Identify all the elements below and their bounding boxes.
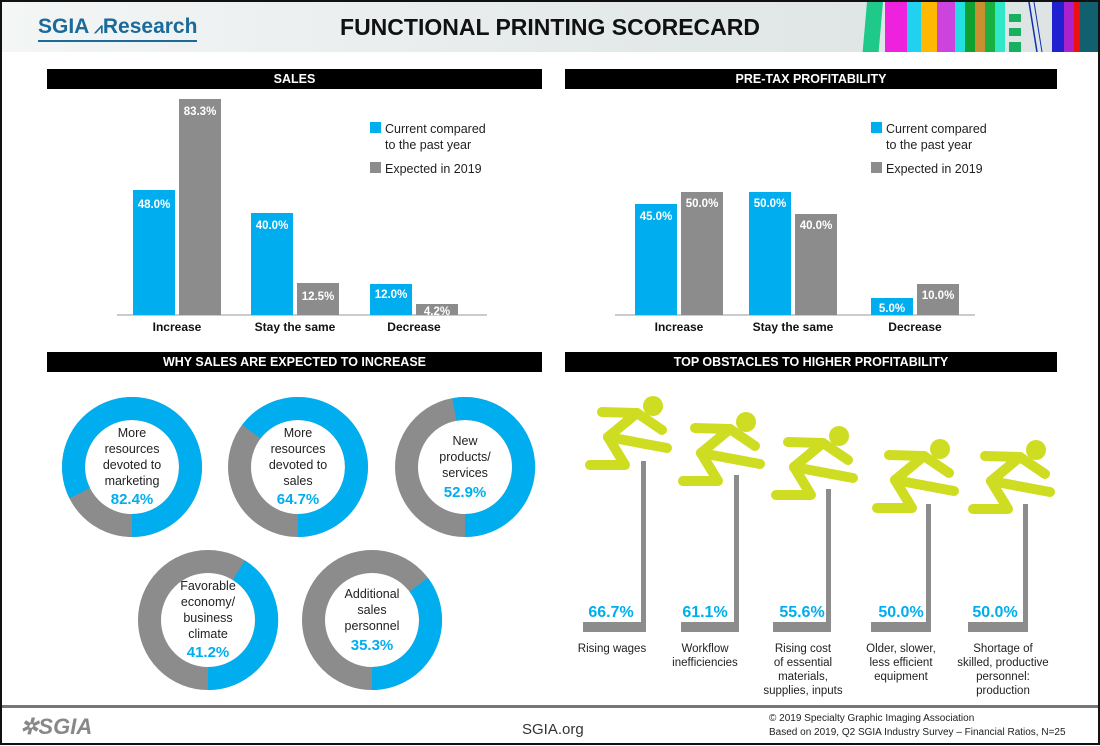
donut: economy [150, 562, 267, 679]
profit chart: 50.0% [754, 198, 786, 210]
hurdle 3: 55.6% [779, 604, 825, 621]
hurdle chart [578, 396, 1055, 697]
heading: why sales [47, 352, 542, 372]
donut: marketing: 82.4% [111, 491, 153, 508]
hurdle 3: of essential [774, 657, 832, 669]
donut: personnel: 35.3% [351, 637, 393, 654]
legend: profit [871, 122, 987, 176]
hurdle 4: 50.0% [878, 604, 924, 621]
donut: sales: sales [283, 474, 313, 488]
hurdle 1 [578, 396, 667, 655]
sales chart: 83.3% [184, 106, 216, 118]
hurdle 5: production [976, 685, 1030, 697]
hurdle 5: 50.0% [972, 604, 1018, 621]
hurdle 4: Older, slower, [866, 643, 936, 655]
title: FUNCTIONAL PRINTING SCORECARD [340, 14, 760, 40]
profit chart: 5.0% [879, 303, 905, 315]
donut: personnel [314, 562, 431, 678]
header band [2, 2, 1098, 52]
profit chart: Decrease [888, 320, 942, 334]
donut: personnel: Additional [345, 587, 399, 601]
footer [2, 705, 1098, 746]
heading: obstacles [565, 352, 1057, 372]
footer credits: Based on 2019, Q2 SGIA Industry Survey – Financial Ratios, N=25 [769, 727, 1066, 738]
sales chart: Stay the same [255, 320, 336, 334]
donut: sales [240, 408, 356, 526]
donut: economy: economy/ [181, 595, 236, 609]
hurdle 3: materials, [778, 671, 828, 683]
donut: marketing: devoted to [103, 458, 161, 472]
donut: economy: 41.2% [187, 644, 229, 661]
hurdle 2: 61.1% [682, 604, 728, 621]
sales chart: Increase [153, 320, 202, 334]
donut: marketing [74, 408, 191, 526]
hurdle 1: Rising wages [578, 643, 646, 655]
panel: sales [47, 69, 542, 334]
sales chart: 4.2% [424, 306, 450, 318]
sales chart [117, 99, 487, 334]
profit chart: 40.0% [800, 220, 832, 232]
sales chart: 40.0% [256, 220, 288, 232]
donut: marketing: More [118, 426, 146, 440]
hurdle 3: Rising cost [775, 643, 832, 655]
profit chart [615, 192, 975, 334]
donut: new products: 52.9% [444, 484, 486, 501]
hurdle 5: Shortage of [973, 643, 1034, 655]
legend: profit: Current compared [886, 122, 987, 136]
donut: new products: products/ [439, 450, 491, 464]
heading: profitability [565, 69, 1057, 89]
donut: new products: services [442, 466, 488, 480]
hurdle 5: skilled, productive [957, 657, 1049, 669]
hurdle 3 [763, 426, 853, 697]
heading: sales: SALES [274, 72, 315, 86]
donut: economy: business [183, 611, 233, 625]
legend: profit: Expected in 2019 [886, 162, 983, 176]
sales chart: 12.0% [375, 289, 407, 301]
donut: marketing: marketing [105, 474, 159, 488]
footer logo: ✲SGIA [20, 714, 92, 739]
donut: sales: More [284, 426, 312, 440]
legend: sales: Expected in 2019 [385, 162, 482, 176]
footer url: SGIA.org [522, 721, 584, 738]
hurdle 2: Workflow [681, 643, 729, 655]
donut: sales: resources [271, 442, 325, 456]
footer credits: © 2019 Specialty Graphic Imaging Association [769, 713, 974, 724]
logo: SGIA Research: SGIA ⩘Research [38, 15, 197, 38]
profit chart: 10.0% [922, 290, 954, 302]
hurdle 1: 66.7% [588, 604, 634, 621]
donut: personnel: personnel [345, 619, 399, 633]
donut: new products: New [452, 434, 478, 448]
footer credits [769, 713, 1066, 738]
heading: sales [47, 69, 542, 89]
donut: economy: Favorable [180, 579, 236, 593]
donut: economy: climate [188, 627, 228, 641]
panel: profitability [565, 69, 1057, 334]
donut: new products [406, 408, 524, 526]
donut: personnel: sales [357, 603, 387, 617]
legend: profit: to the past year [886, 138, 972, 152]
heading: profitability: PRE-TAX PROFITABILITY [736, 72, 886, 86]
hurdle 2: inefficiencies [672, 657, 738, 669]
profit chart: 45.0% [640, 211, 672, 223]
profit chart: Stay the same [753, 320, 834, 334]
sales chart: Decrease [387, 320, 441, 334]
legend: sales [370, 122, 486, 176]
decorative stripes [862, 2, 1098, 52]
legend: sales: to the past year [385, 138, 471, 152]
hurdle 5 [957, 440, 1050, 697]
sales chart: 12.5% [302, 291, 334, 303]
sales chart: 48.0% [138, 199, 170, 211]
donut charts [62, 397, 536, 690]
hurdle 4 [866, 439, 954, 683]
profit chart: 50.0% [686, 198, 718, 210]
profit chart: Increase [655, 320, 704, 334]
donut: sales: devoted to [269, 458, 327, 472]
hurdle 4: less efficient [869, 657, 933, 669]
donut: marketing: resources [105, 442, 159, 456]
hurdle 5: personnel: [976, 671, 1030, 683]
hurdle 3: supplies, inputs [763, 685, 843, 697]
heading: obstacles: TOP OBSTACLES TO HIGHER PROFITABILITY [674, 355, 948, 369]
legend: sales: Current compared [385, 122, 486, 136]
hurdle 4: equipment [874, 671, 929, 683]
donut: sales: 64.7% [277, 491, 319, 508]
heading: why sales: WHY SALES ARE EXPECTED TO INCREASE [163, 355, 426, 369]
hurdle 2 [672, 412, 760, 669]
